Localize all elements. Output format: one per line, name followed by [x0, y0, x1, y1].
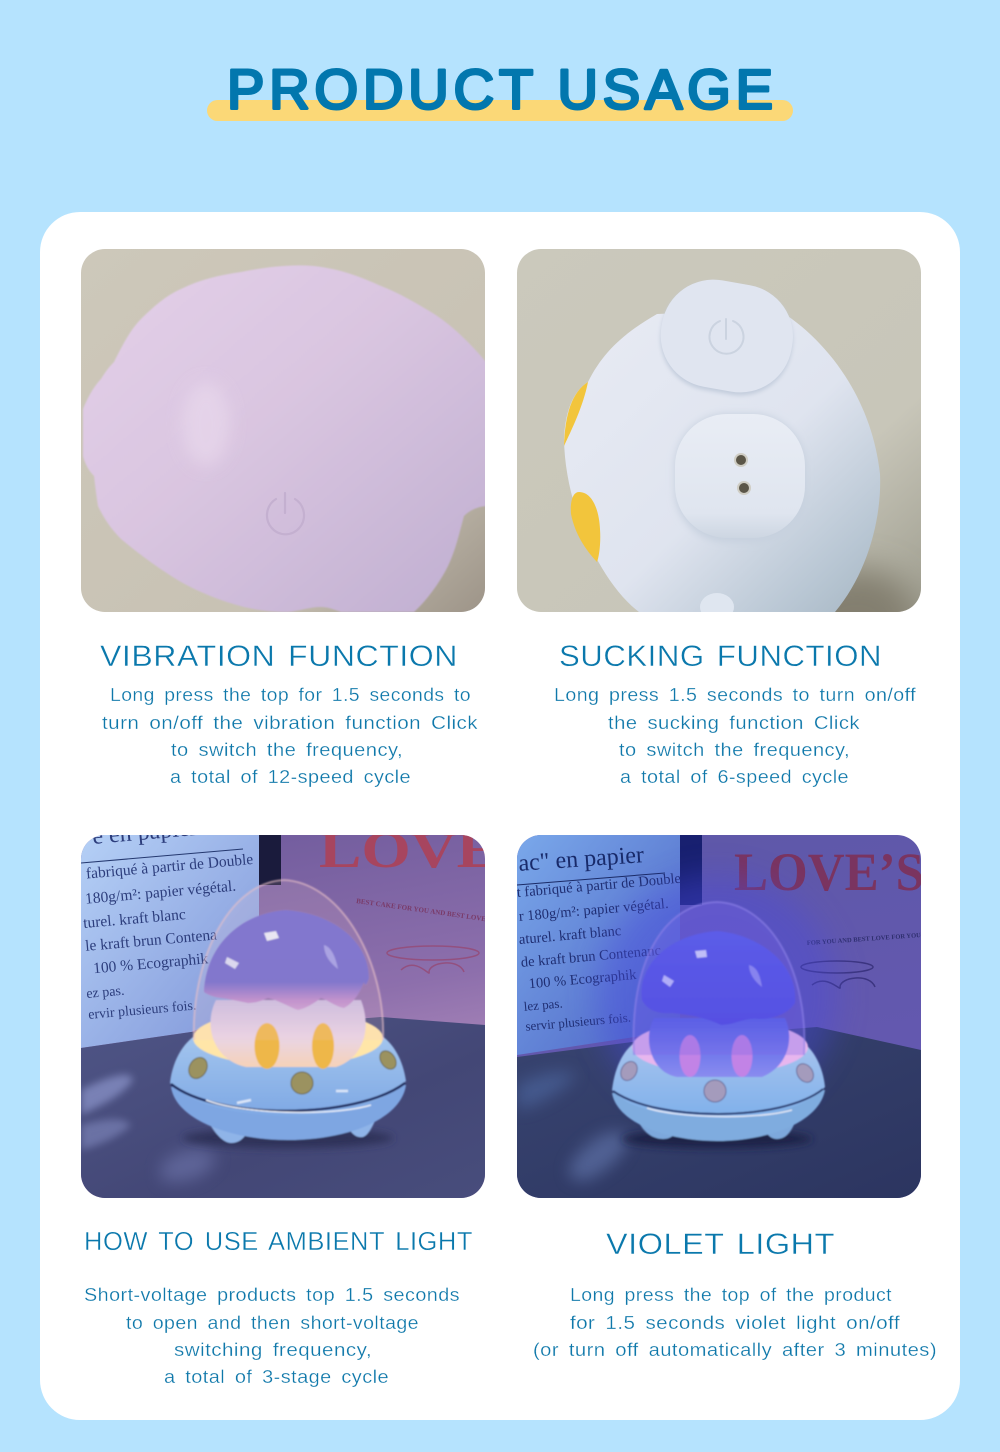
- description: to switch the frequency,: [171, 739, 403, 760]
- lamp: [612, 902, 825, 1148]
- jellyfish cap: [642, 931, 795, 1025]
- photo: ambient warm light lamp: [81, 835, 485, 1198]
- description: [554, 684, 916, 787]
- title: product usage: [207, 60, 793, 121]
- caption: sucking function: [554, 640, 916, 787]
- glass dome: [634, 902, 804, 1055]
- background book and print text: 100 % Ecographik: [528, 967, 638, 992]
- spots: [618, 1059, 817, 1102]
- background book and print text: 180g/m²: papier végétal.: [84, 878, 237, 908]
- description: for 1.5 seconds violet light on/off: [570, 1312, 900, 1333]
- saucer top: [170, 1033, 406, 1116]
- feet: [639, 1123, 677, 1139]
- cloth surface: [517, 1027, 921, 1198]
- background book and print text: t fabriqué à partir de Double: [517, 871, 682, 901]
- description: (or turn off automatically after 3 minutes): [533, 1339, 937, 1360]
- light well: [632, 1020, 808, 1074]
- description: Long press the top of the product: [570, 1284, 892, 1305]
- description: Short-voltage products top 1.5 seconds: [84, 1284, 460, 1305]
- suction nozzle with holes: [675, 414, 805, 542]
- description: Long press the top for 1.5 seconds to: [110, 684, 471, 705]
- top button with power icon: [652, 271, 801, 404]
- background book and print text: FOR YOU AND BEST LOVE FOR YOU: [807, 932, 921, 947]
- glass dome: [194, 880, 383, 1040]
- background book and print text: 100 % Ecographik: [92, 950, 209, 977]
- description: a total of 3-stage cycle: [164, 1366, 389, 1387]
- background book and print text: servir plusieurs fois.: [525, 1010, 632, 1034]
- description: a total of 6-speed cycle: [620, 766, 849, 787]
- description: the sucking function Click: [608, 712, 860, 733]
- background book and print text: ac" en papier: [518, 842, 645, 877]
- saucer bowl: [171, 1085, 406, 1140]
- jellyfish cap: [204, 910, 369, 1010]
- caption: violet light: [533, 1228, 937, 1360]
- panel: white card: [40, 212, 960, 1420]
- background book and print text: fabriqué à partir de Double: [85, 851, 254, 883]
- description: to switch the frequency,: [619, 739, 850, 760]
- jellyfish body: [210, 1000, 366, 1067]
- photo: violet light lamp: [517, 835, 921, 1198]
- description: switching frequency,: [174, 1339, 372, 1360]
- description: [84, 1284, 460, 1387]
- heading: SUCKING FUNCTION: [559, 640, 882, 673]
- background book and print text: [75, 815, 499, 1048]
- background book and print text: ervir plusieurs fois.: [88, 998, 197, 1023]
- background book and print text: de kraft brun Contenanc: [520, 943, 662, 971]
- lamp: [170, 880, 406, 1148]
- feet: [209, 1123, 247, 1143]
- background book and print text: le kraft brun Contena: [84, 926, 218, 955]
- caption: vibration function: [100, 640, 478, 787]
- yellow spots: [185, 1048, 399, 1094]
- heading: HOW TO USE AMBIENT LIGHT: [84, 1228, 473, 1256]
- description: [102, 684, 478, 787]
- heading: VIOLET LIGHT: [606, 1228, 835, 1261]
- light well: [193, 1010, 383, 1066]
- description: turn on/off the vibration function Click: [102, 712, 478, 733]
- background book and print text: BEST CAKE FOR YOU AND BEST LOVE: [356, 897, 485, 923]
- icon: power symbol: [267, 493, 304, 534]
- background book and print text: lez pas.: [523, 995, 563, 1014]
- background book and print text: aturel. kraft blanc: [518, 923, 622, 948]
- heading: VIBRATION FUNCTION: [100, 640, 458, 673]
- description: Long press 1.5 seconds to turn on/off: [554, 684, 916, 705]
- photo: white toy with suction nozzle: [517, 249, 921, 612]
- title highlight bar: [207, 100, 793, 121]
- photo: pink toy with power button: [81, 249, 485, 612]
- background book and print text: ez pas.: [86, 984, 125, 1002]
- toy body with yellow spots: [564, 309, 880, 621]
- caption: how to use ambient light: [84, 1228, 473, 1387]
- description: [533, 1284, 937, 1360]
- background book and print text: turel. kraft blanc: [82, 906, 187, 932]
- description: a total of 12-speed cycle: [170, 766, 411, 787]
- background book and print text: r 180g/m²: papier végétal.: [518, 896, 669, 925]
- saucer bowl: [612, 1090, 825, 1141]
- blue glow: [597, 875, 837, 1115]
- description: to open and then short-voltage: [126, 1312, 419, 1333]
- background book and print text: [513, 835, 924, 1055]
- cloth surface: [81, 1017, 485, 1198]
- saucer top: [612, 1040, 825, 1118]
- jellyfish body: [649, 1018, 789, 1077]
